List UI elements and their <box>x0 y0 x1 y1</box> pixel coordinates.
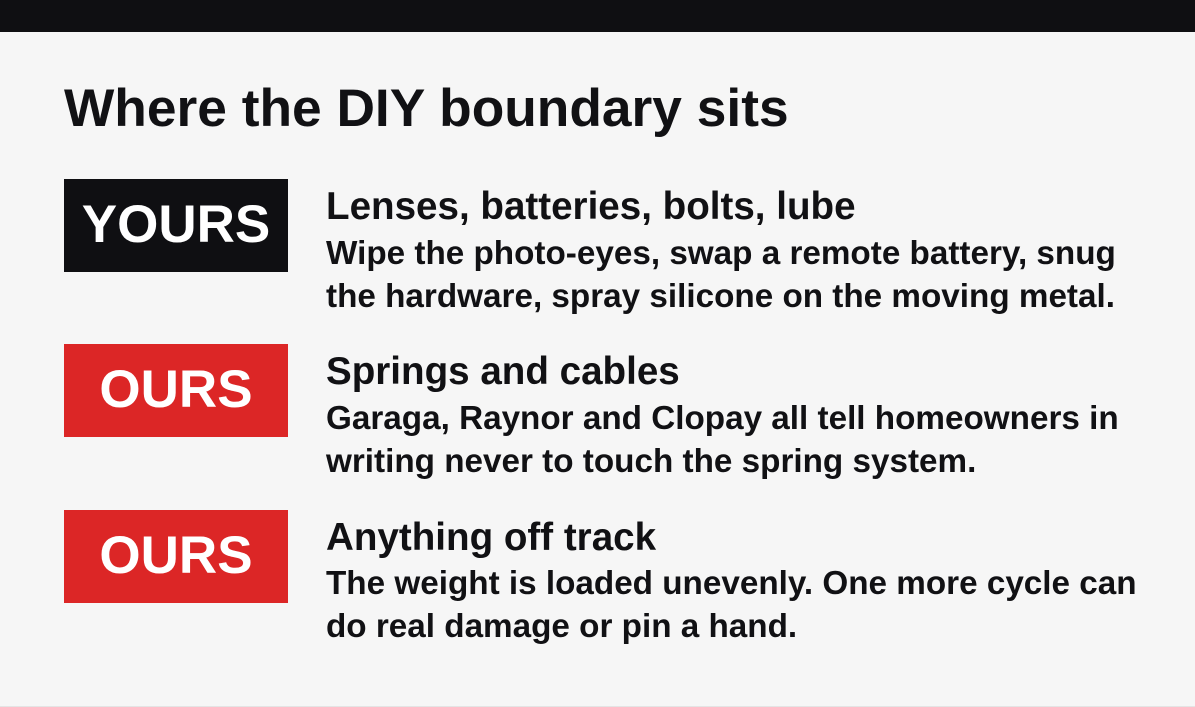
badge: ours springs <box>64 344 288 437</box>
badge: ours off track <box>64 510 288 603</box>
title: Where the DIY boundary sits <box>64 79 789 138</box>
text: off track <box>326 565 1137 644</box>
text: lenses: Wipe the photo-eyes, swap a remote battery, snug <box>326 235 1116 272</box>
text: lenses <box>326 235 1116 314</box>
text: springs <box>326 400 1119 480</box>
top bar <box>0 0 1195 32</box>
badge: ours springs: OURS <box>99 360 253 419</box>
heading: springs: Springs and cables <box>326 350 680 393</box>
text: off track: do real damage or pin a hand. <box>326 608 797 644</box>
badge: ours off track: OURS <box>99 526 253 585</box>
badge: yours: YOURS <box>82 195 270 254</box>
heading: lenses: Lenses, batteries, bolts, lube <box>326 185 856 228</box>
text: springs: writing never to touch the spring system. <box>326 442 976 480</box>
heading: off track: Anything off track <box>326 516 656 559</box>
badge: yours <box>64 179 288 272</box>
text: off track: The weight is loaded unevenly. One more cycle can <box>326 565 1137 602</box>
text: springs: Garaga, Raynor and Clopay all tell homeowners in <box>326 400 1119 437</box>
text: lenses: the hardware, spray silicone on the moving metal. <box>326 278 1115 314</box>
